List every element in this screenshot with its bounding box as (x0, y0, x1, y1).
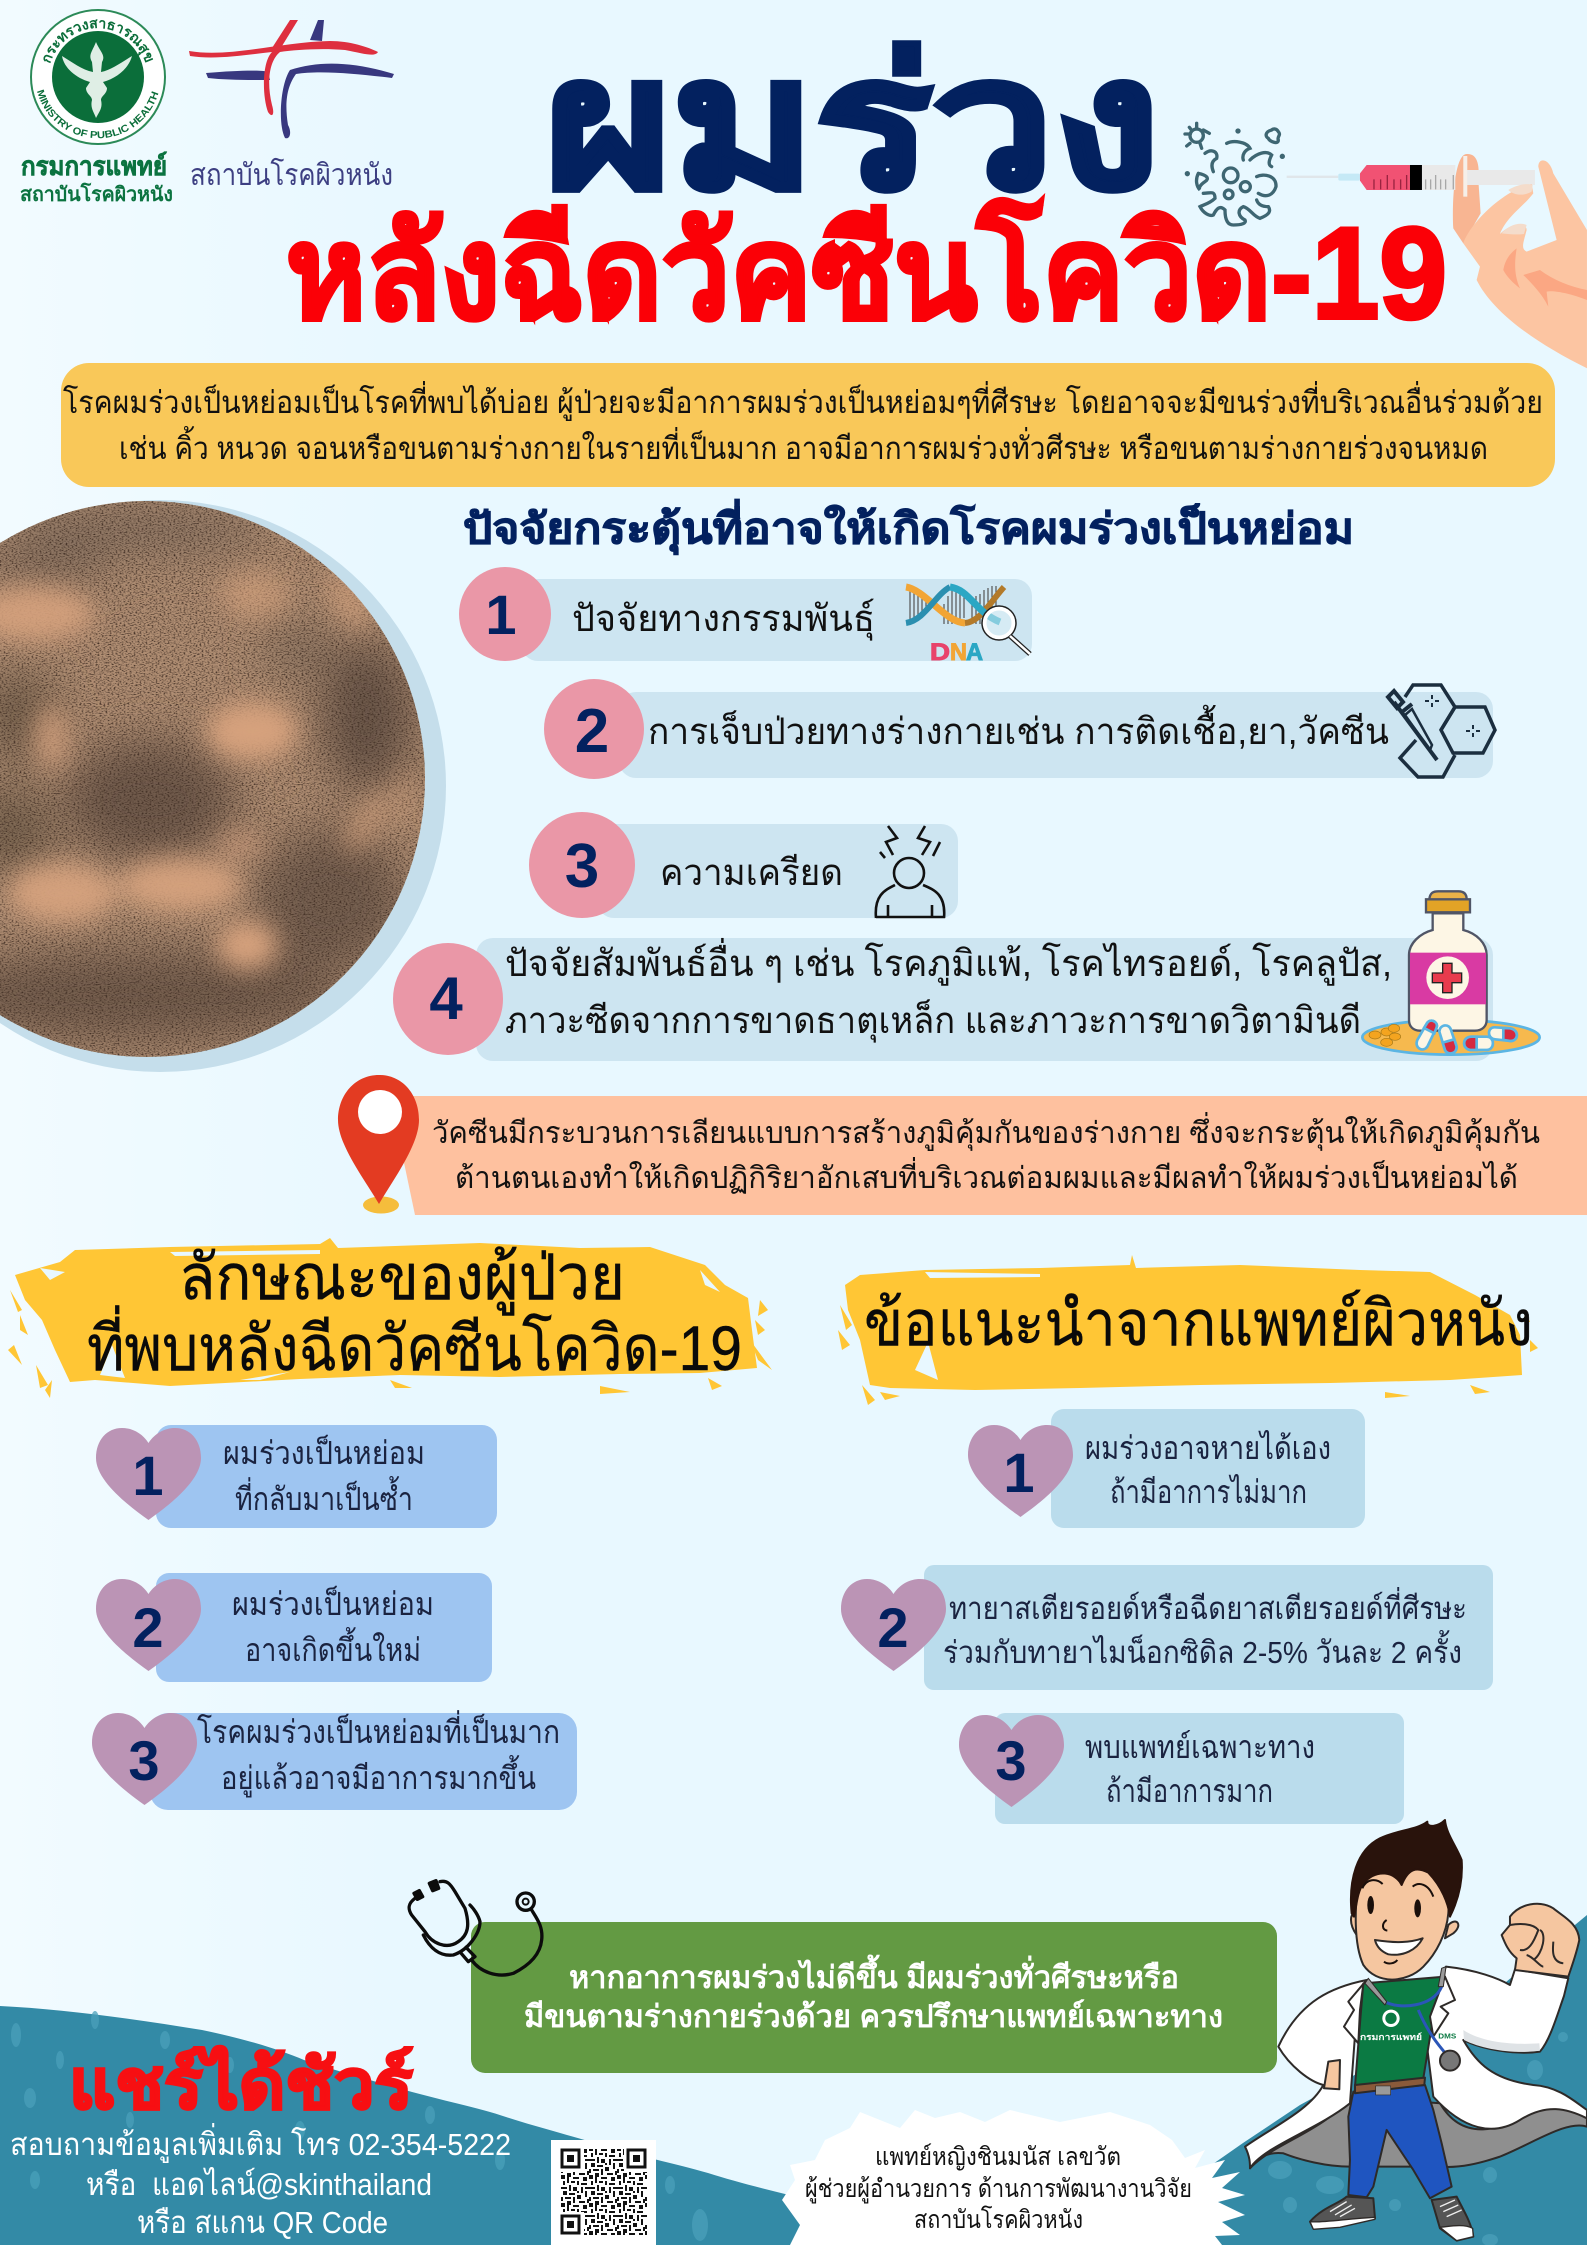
icon: medicine bottle and pills (1362, 891, 1540, 1055)
heading: patient characteristics: ที่พบหลังฉีดวัคซีนโควิด-19 (87, 1305, 742, 1384)
green advice panel: หากอาการผมร่วงไม่ดีขึ้น มีผมร่วงทั่วศีรษะหรือ (569, 1954, 1179, 1995)
factor 2: physical illness: การเจ็บป่วยทางร่างกายเช่น การติดเชื้อ,ยา,วัคซีน (648, 704, 1389, 752)
characteristics item 1 (96, 1425, 497, 1528)
credits (805, 2143, 1192, 2234)
characteristics item 2: ผมร่วงเป็นหย่อม (232, 1585, 434, 1622)
face (1356, 1859, 1448, 1980)
contact details: หรือ สแกน QR Code (137, 2205, 388, 2240)
green advice panel (471, 1922, 1277, 2073)
shirt text: กรมการแพทย์ (1360, 2032, 1422, 2042)
advice item 1: ถ้ามีอาการไม่มาก (1110, 1474, 1307, 1510)
shoe laces (1330, 2200, 1462, 2217)
logo: Ministry of Public Health seal: กระทรวงสาธารณสุข (44, 19, 154, 64)
smile (1375, 1938, 1423, 1955)
icon: DNA with magnifier: N (950, 639, 967, 666)
factor 2: physical illness: 2 (575, 697, 609, 766)
factor 2: physical illness (544, 679, 1495, 779)
coat left (1245, 1980, 1367, 2168)
icon: molecule and syringe (1388, 685, 1495, 777)
QR code (551, 2140, 656, 2245)
hand on hip (1324, 2060, 1340, 2089)
contact details (10, 2123, 511, 2240)
logo text: department name: กรมการแพทย์ (21, 151, 167, 181)
advice item 3 (959, 1713, 1404, 1824)
heading: patient characteristics: ลักษณะของผู้ป่วย (179, 1243, 625, 1316)
icon: stressed person (876, 826, 945, 918)
intro text (63, 381, 1543, 466)
factor 3: stress (529, 812, 958, 918)
factor 1: genetics: ปัจจัยทางกรรมพันธุ์ (572, 598, 875, 641)
factor 4: related conditions: ภาวะซีดจากการขาดธาตุเหล็ก และภาวะการขาดวิตามินดี (505, 997, 1361, 1043)
advice item 2 (841, 1565, 1493, 1690)
green advice panel: มีขนตามร่างกายร่วงด้วย ควรปรึกษาแพทย์เฉพาะทาง (524, 1999, 1223, 2034)
characteristics item 2: อาจเกิดขึ้นใหม่ (245, 1627, 421, 1668)
subtitle: หลังฉีดวัคซีนโควิด-19 (286, 198, 1447, 346)
heading: patient characteristics (8, 1238, 772, 1398)
pants (1348, 2085, 1452, 2198)
characteristics item 1: ผมร่วงเป็นหย่อม (223, 1434, 425, 1471)
callout: share safely: แชร์ได้ชัวร์ (69, 2045, 413, 2123)
belt (1355, 2078, 1425, 2093)
factor 4: related conditions (393, 891, 1540, 1061)
coat sleeve shading (1463, 2030, 1540, 2052)
heading: dermatologist advice: ข้อแนะนำจากแพทย์ผิวหนัง (864, 1289, 1533, 1359)
logo text: department name (20, 151, 173, 206)
icon: DNA with magnifier (906, 586, 1030, 666)
advice item 1 (968, 1409, 1365, 1528)
factor 4: related conditions: 4 (429, 965, 463, 1032)
vaccine mechanism callout (338, 1075, 1587, 1215)
eyebrows and nose (1362, 1880, 1433, 1963)
advice item 2: ร่วมกับทายาไมน็อกซิดิล 2-5% วันละ 2 ครั้ง (943, 1630, 1462, 1670)
white brush patch behind credits (782, 2110, 1245, 2245)
icon: DNA with magnifier: A (966, 639, 983, 666)
logo: institute of dermatology swoosh (189, 20, 394, 192)
credits: ผู้ช่วยผู้อำนวยการ ด้านการพัฒนางานวิจัย (805, 2175, 1192, 2204)
characteristics item 3: อยู่แล้วอาจมีอาการมากขึ้น (221, 1755, 536, 1798)
icon: DNA with magnifier: D (930, 639, 950, 666)
vaccine mechanism callout: วัคซีนมีกระบวนการเลียนแบบการสร้างภูมิคุ้มกันของร่างกาย ซึ่งจะกระตุ้นให้เกิดภูมิคุ้มกัน (432, 1112, 1540, 1152)
title: ผมร่วง (545, 22, 1160, 226)
photo: scalp with alopecia patches (0, 490, 446, 1072)
factor 3: stress: ความเครียด (660, 852, 843, 893)
vaccine mechanism callout: ต้านตนเองทำให้เกิดปฏิกิริยาอักเสบที่บริเวณต่อมผมและมีผลทำให้ผมร่วงเป็นหย่อมได้ (455, 1157, 1518, 1195)
cape lining (1250, 2097, 1587, 2168)
characteristics item 2: 2 (132, 1596, 164, 1659)
advice item 1: 1 (1003, 1441, 1035, 1504)
heading: trigger factors: ปัจจัยกระตุ้นที่อาจให้เกิดโรคผมร่วงเป็นหย่อม (463, 499, 1354, 555)
credits: สถาบันโรคผิวหนัง (914, 2205, 1083, 2234)
contact details: สอบถามข้อมูลเพิ่มเติม โทร 02-354-5222 (10, 2123, 511, 2163)
hair (1351, 1820, 1462, 1917)
factor 3: stress: 3 (565, 832, 599, 901)
bottom teal wave background (0, 1915, 1587, 2245)
advice item 3: 3 (995, 1729, 1027, 1792)
ears (1351, 1913, 1458, 1938)
fist (1502, 1904, 1579, 1977)
logo: Ministry of Public Health seal: MINISTRY OF PUBLIC HEALTH (37, 90, 158, 138)
factor 1: genetics: 1 (485, 583, 517, 646)
shirt emblem (1382, 2010, 1400, 2027)
intro panel (61, 363, 1555, 487)
advice item 3: ถ้ามีอาการมาก (1106, 1773, 1273, 1809)
logo: institute of dermatology swoosh: สถาบันโรคผิวหนัง (190, 157, 393, 192)
advice item 3: พบแพทย์เฉพาะทาง (1085, 1729, 1315, 1765)
icon: stethoscope (409, 1881, 542, 1975)
advice item 1: ผมร่วงอาจหายได้เอง (1085, 1430, 1331, 1466)
characteristics item 3: 3 (128, 1729, 160, 1792)
advice item 2: 2 (877, 1596, 909, 1659)
eyes (1367, 1896, 1374, 1914)
icon: hand holding syringe (1287, 154, 1587, 368)
icon: virus (1185, 123, 1283, 225)
coat lapels (1344, 1977, 1455, 2043)
icon: location pin (338, 1075, 419, 1214)
doctor mascot (1245, 1820, 1587, 2241)
logo text: department name: สถาบันโรคผิวหนัง (20, 182, 173, 206)
stethoscope (1385, 1987, 1448, 2057)
characteristics item 3 (92, 1710, 577, 1810)
logo: Ministry of Public Health seal (30, 9, 166, 145)
factor 4: related conditions: ปัจจัยสัมพันธ์อื่น ๆ เช่น โรคภูมิแพ้, โรคไทรอยด์, โรคลูปัส, (505, 937, 1392, 986)
green shirt (1355, 1977, 1445, 2087)
advice item 2: ทายาสเตียรอยด์หรือฉีดยาสเตียรอยด์ที่ศีรษะ (949, 1587, 1467, 1626)
heading: dermatologist advice (838, 1255, 1538, 1405)
characteristics item 3: โรคผมร่วงเป็นหย่อมที่เป็นมาก (197, 1710, 560, 1750)
coat text: DMS (1438, 2034, 1457, 2041)
contact details: หรือ แอดไลน์@skinthailand (86, 2167, 432, 2202)
characteristics item 1: 1 (132, 1444, 164, 1507)
shoes (1310, 2197, 1375, 2228)
characteristics item 1: ที่กลับมาเป็นซ้ำ (235, 1476, 413, 1517)
credits: แพทย์หญิงชินมนัส เลขวัต (875, 2143, 1121, 2171)
factor 1: genetics (459, 567, 1032, 666)
coat right (1427, 1967, 1587, 2129)
characteristics item 2 (96, 1573, 492, 1682)
